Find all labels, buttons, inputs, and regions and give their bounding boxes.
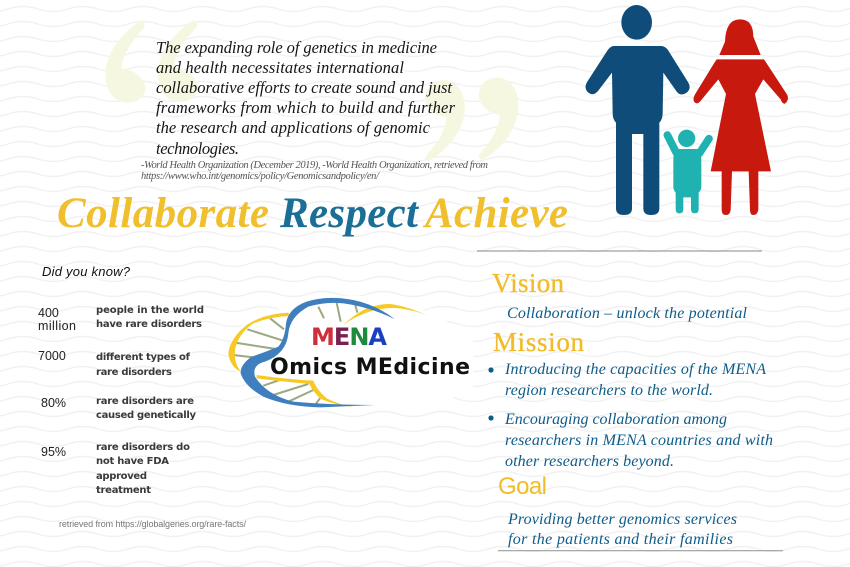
icon: mother: [694, 19, 788, 215]
mission bullet 2: researchers in MENA countries and with: [505, 432, 773, 449]
goal text: [507, 511, 737, 548]
stat: 7000: rare disorders: [96, 367, 172, 378]
blue strand: [241, 298, 395, 407]
title: Collaborate Respect Achieve: [57, 190, 568, 237]
logo text: MENA: MENA: [311, 323, 387, 351]
divider bottom right: [498, 550, 783, 551]
logo: MENA Omics MEdicine: [228, 296, 473, 411]
quote text: and health necessitates international: [156, 58, 404, 77]
stat: 95%: 95%: [41, 445, 66, 459]
icon: child: [667, 130, 709, 213]
stat: 7000: 7000: [38, 349, 66, 363]
goal heading: Goal: [498, 473, 547, 500]
vision heading: Vision: [492, 268, 564, 298]
stat: 95%: rare disorders do: [96, 442, 190, 453]
goal text: Providing better genomics services: [507, 511, 737, 528]
stat: 95%: [41, 442, 190, 496]
quote text: collaborative efforts to create sound and just: [156, 78, 452, 97]
title: Collaborate Respect Achieve: Respect: [279, 190, 420, 237]
stat: 80%: [41, 396, 196, 421]
stat: 400 million: [38, 305, 204, 333]
title: Collaborate Respect Achieve: Achieve: [422, 190, 568, 237]
icon: father: [586, 5, 690, 215]
stat: 95%: approved: [96, 471, 147, 482]
quote text: frameworks from which to build and further: [156, 98, 456, 117]
quote citation: [141, 160, 488, 182]
goal text: for the patients and their families: [508, 531, 733, 548]
yellow strand: [228, 304, 428, 407]
mission bullet 2: Encouraging collaboration among: [504, 411, 727, 428]
mission bullet 1: [488, 361, 766, 399]
mission bullet 1: region researchers to the world.: [505, 382, 713, 399]
did you know heading: Did you know?: [42, 264, 131, 279]
title: Collaborate Respect Achieve: Collaborate: [57, 190, 269, 237]
stat: 80%: 80%: [41, 396, 66, 410]
logo text: Omics MEdicine: Omics MEdicine: [270, 355, 470, 380]
quote citation: https://www.who.int/genomics/policy/Genomicsandpolicy/en/: [141, 171, 380, 182]
stat: 400 million: people in the world: [96, 305, 204, 316]
mission heading: Mission: [493, 327, 584, 357]
stat: 400 million: have rare disorders: [96, 319, 202, 330]
stat: 7000: [38, 349, 191, 378]
mission bullet 2: [488, 411, 773, 470]
stat: 400 million: 400: [38, 306, 59, 320]
mission bullet 2: other researchers beyond.: [505, 453, 674, 470]
quote text: the research and applications of genomic: [156, 118, 431, 137]
stat: 400 million: million: [38, 319, 76, 333]
mission bullet 1: Introducing the capacities of the MENA: [504, 361, 766, 378]
source note: retrieved from https://globalgenes.org/rare-facts/: [59, 519, 246, 529]
quote citation: -World Health Organization (December 2019), -World Health Organization, retrieved from: [141, 160, 488, 171]
divider top right: [477, 250, 762, 252]
DNA rungs: [233, 303, 357, 405]
quote text: [156, 38, 456, 158]
stat: 95%: not have FDA: [96, 456, 169, 467]
stat: 7000: different types of: [96, 352, 191, 363]
quote text: technologies.: [156, 139, 239, 158]
quote text: The expanding role of genetics in medicine: [156, 38, 437, 57]
vision text: Collaboration – unlock the potential: [507, 305, 748, 322]
stat: 80%: rare disorders are: [96, 396, 194, 407]
stat: 80%: caused genetically: [96, 410, 196, 421]
stat: 95%: treatment: [96, 485, 151, 496]
decorative quotation marks: [105, 20, 519, 161]
icon: family: [586, 5, 788, 215]
